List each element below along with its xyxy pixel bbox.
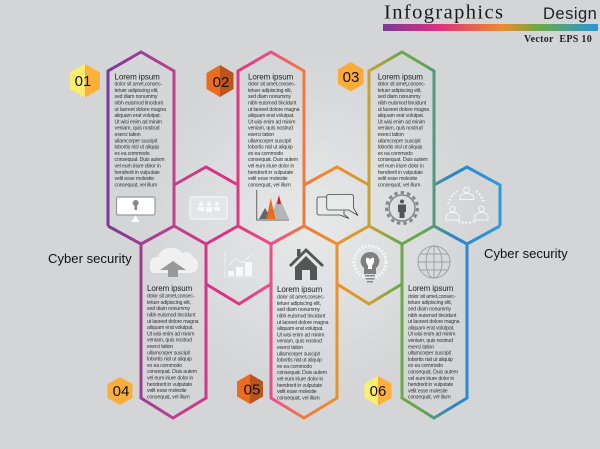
badge 06 (364, 376, 392, 406)
panel text 2: velit esse molestie (248, 176, 288, 182)
panel text 4: velit esse molestie (147, 388, 187, 394)
panel text 4: tetuer adipiscing elit, (147, 300, 191, 306)
panel text 6: consequat, vel illum (408, 395, 451, 401)
panel text 3: ex ea commodo (378, 151, 413, 157)
panel text 2: consequat. Duis autem (248, 157, 298, 163)
panel text 2: hendrerit in vulputate (248, 170, 293, 176)
icon: gear with person (386, 192, 418, 224)
panel text 2: ex ea commodo (248, 151, 283, 157)
panel text 1: exerci tation (114, 132, 141, 138)
panel text 2: ullamcorper suscipit (248, 138, 292, 144)
panel text 4: vel eum iriure dolor in (147, 376, 193, 382)
icon: growth chart (225, 252, 257, 277)
panel text 3: ullamcorper suscipit (378, 138, 421, 144)
panel text 2: lobortis nisl ut aliquip (248, 145, 293, 151)
panel text 6: consequat. Duis autem (408, 370, 458, 376)
panel text 2: ut laoreet dolore magna (248, 107, 300, 113)
panel text 1: consequat. Duis autem (114, 157, 164, 163)
panel text 3: lobortis nisl ut aliquip (378, 145, 423, 151)
panel text 4: sed diam nonummy (147, 306, 190, 312)
badge 03 (338, 62, 364, 92)
panel text 1: ut laoreet dolore magna (114, 107, 166, 113)
panel text 2: dolor sit amet,consec- (248, 82, 296, 88)
panel text 5: consequat. Duis autem (277, 370, 327, 376)
label: Cyber security right: Cyber security (484, 246, 568, 261)
panel text 4: veniam, quis nostrud (147, 338, 192, 344)
panel text 5: exerci tation (277, 345, 303, 351)
badge 05 (237, 374, 263, 404)
badge 04: 04 (113, 383, 129, 400)
panel text 5: velit esse molestie (277, 389, 317, 395)
panel text 6: hendrerit in vulputate (408, 382, 453, 388)
badge 02 (206, 65, 234, 97)
panel text 6: aliquam erat volutpat. (408, 325, 454, 331)
panel text 4: exerci tation (147, 344, 173, 350)
panel text 6: Lorem ipsum (408, 284, 454, 293)
panel text 2: aliquam erat volutpat. (248, 113, 294, 119)
badge 03: 03 (343, 69, 359, 86)
panel text 3: consequat, vel illum (378, 182, 420, 188)
panel text 6: dolor sit amet,consec- (408, 294, 456, 300)
panel text 1: dolor sit amet,consec- (114, 82, 162, 88)
panel text 3: nibh euismod tincidunt (378, 100, 427, 106)
badge 02: 02 (213, 74, 229, 91)
panel text 6: lobortis nisl ut aliquip (408, 357, 453, 363)
label: Cyber security left: Cyber security (48, 251, 132, 266)
panel text 3: ut laoreet dolore magna (378, 107, 429, 113)
panel text 5: sed diam nonummy (277, 307, 320, 313)
icon: cloud upload (150, 248, 198, 277)
panel text 3 (378, 72, 429, 188)
panel text 5: tetuer adipiscing elit, (277, 301, 321, 307)
panel text 4: hendrerit in vulputate (147, 382, 192, 388)
panel text 4: ullamcorper suscipit (147, 350, 191, 356)
panel text 6: sed diam nonummy (408, 306, 451, 312)
panel text 6: exerci tation (408, 344, 434, 350)
panel text 1: hendrerit in vulputate (114, 170, 160, 176)
panel text 5: veniam, quis nostrud (277, 339, 322, 345)
panel text 6: tetuer adipiscing elit, (408, 300, 452, 306)
panel text 5 (277, 285, 329, 401)
panel text 4: ex ea commodo (147, 363, 182, 369)
badge 01 (70, 64, 100, 98)
panel text 3: vel eum iriure dolor in (378, 164, 424, 170)
panel text 6: ut laoreet dolore magna (408, 319, 460, 325)
panel text 2: Ut wisi enim ad minim (248, 119, 295, 125)
panel text 2: vel eum iriure dolor in (248, 164, 294, 170)
panel text 3: dolor sit amet,consec- (378, 82, 426, 88)
panel text 2: exerci tation (248, 132, 274, 138)
icon: light bulb with gear (354, 246, 386, 282)
panel text 6: veniam, quis nostrud (408, 338, 453, 344)
panel text 3: tetuer adipiscing elit, (378, 88, 422, 94)
panel text 5: ex ea commodo (277, 364, 312, 370)
panel text 3: Lorem ipsum (378, 72, 423, 82)
panel text 5: nibh euismod tincidunt (277, 314, 326, 320)
subtitle: Vector EPS 10: Vector EPS 10 (524, 34, 592, 45)
hexagon network outline (108, 52, 500, 418)
panel text 1: Ut wisi enim ad minim (114, 119, 162, 125)
icon: mountain chart (257, 190, 289, 220)
panel text 6: vel eum iriure dolor in (408, 376, 454, 382)
panel text 2: tetuer adipiscing elit, (248, 88, 292, 94)
icon: team cycle (446, 187, 488, 223)
badge 01: 01 (75, 73, 91, 90)
panel text 3: veniam, quis nostrud (378, 126, 423, 132)
panel text 1 (114, 72, 166, 188)
panel text 1: lobortis nisl ut aliquip (114, 145, 159, 151)
panel text 1: tetuer adipiscing elit, (114, 88, 158, 94)
panel text 6: nibh euismod tincidunt (408, 313, 457, 319)
panel text 1: ullamcorper suscipit (114, 138, 158, 144)
panel text 4: consequat. Duis autem (147, 369, 197, 375)
rainbow title bar (383, 24, 598, 31)
panel text 1: sed diam nonummy (114, 94, 158, 100)
panel text 4: ut laoreet dolore magna (147, 319, 199, 325)
panel text 6 (408, 284, 460, 401)
panel text 3: hendrerit in vulputate (378, 170, 423, 176)
icon: group on screen (190, 197, 227, 219)
panel text 1: Lorem ipsum (114, 72, 160, 82)
panel text 3: velit esse molestie (378, 176, 417, 182)
panel text 4: Ut wisi enim ad minim (147, 331, 194, 337)
title: Design: Design (543, 5, 597, 23)
panel text 6: Ut wisi enim ad minim (408, 332, 455, 338)
panel text 5: aliquam erat volutpat. (277, 326, 323, 332)
panel text 2: veniam, quis nostrud (248, 126, 293, 132)
panel text 4: Lorem ipsum (147, 284, 193, 293)
icon: globe (418, 246, 450, 278)
panel text 1: velit esse molestie (114, 176, 154, 182)
panel text 3: exerci tation (378, 132, 404, 138)
panel text 4 (147, 284, 199, 400)
badge 06: 06 (370, 383, 386, 400)
panel text 1: ex ea commodo (114, 151, 150, 157)
icon: house (289, 248, 324, 280)
panel text 2: Lorem ipsum (248, 72, 294, 82)
panel text 5: dolor sit amet,consec- (277, 295, 325, 301)
panel text 6: ex ea commodo (408, 363, 443, 369)
panel text 3: sed diam nonummy (378, 94, 421, 100)
panel text 6: velit esse molestie (408, 388, 448, 394)
panel text 3: Ut wisi enim ad minim (378, 119, 425, 125)
panel text 4: consequat, vel illum (147, 394, 190, 400)
panel text 5: ullamcorper suscipit (277, 351, 321, 357)
panel text 2: sed diam nonummy (248, 94, 291, 100)
panel text 1: veniam, quis nostrud (114, 126, 160, 132)
panel text 5: Ut wisi enim ad minim (277, 332, 324, 338)
title: Infographics: Infographics (384, 2, 504, 24)
panel text 4: nibh euismod tincidunt (147, 312, 196, 318)
panel text 5: Lorem ipsum (277, 285, 323, 294)
icon: speech bubbles (317, 194, 358, 218)
panel text 5: vel eum iriure dolor in (277, 376, 323, 382)
panel text 1: nibh euismod tincidunt (114, 100, 164, 106)
panel text 4: aliquam erat volutpat. (147, 325, 193, 331)
panel text 4: lobortis nisl ut aliquip (147, 357, 192, 363)
panel text 3: aliquam erat volutpat. (378, 113, 424, 119)
panel text 3: consequat. Duis autem (378, 157, 428, 163)
panel text 2: nibh euismod tincidunt (248, 100, 297, 106)
panel text 5: ut laoreet dolore magna (277, 320, 329, 326)
panel text 2 (248, 72, 300, 188)
panel text 4: dolor sit amet,consec- (147, 294, 195, 300)
badge 05: 05 (244, 382, 260, 398)
panel text 1: consequat, vel illum (114, 182, 157, 188)
icon: monitor with keyhole (116, 197, 155, 222)
badge 04 (108, 377, 132, 405)
panel text 6: ullamcorper suscipit (408, 351, 452, 357)
panel text 1: vel eum iriure dolor in (114, 164, 161, 170)
panel text 2: consequat, vel illum (248, 182, 291, 188)
panel text 1: aliquam erat volutpat. (114, 113, 161, 119)
panel text 5: hendrerit in vulputate (277, 383, 322, 389)
panel text 5: consequat, vel illum (277, 395, 320, 401)
panel text 5: lobortis nisl ut aliquip (277, 358, 322, 364)
